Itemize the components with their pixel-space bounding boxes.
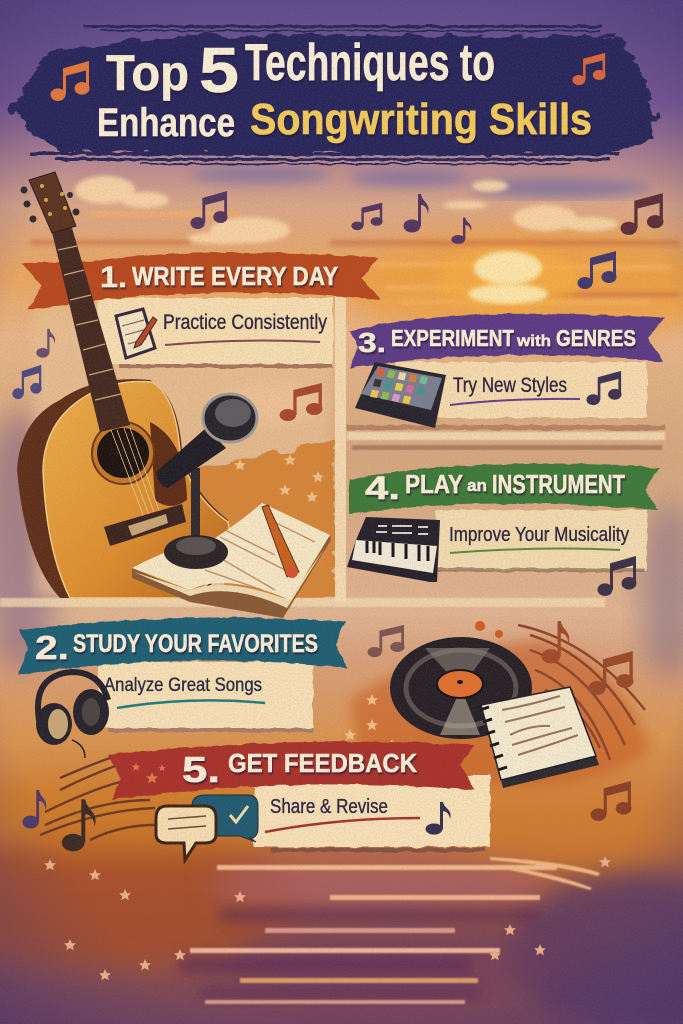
subheading: Practice Consistently — [163, 311, 327, 334]
panel 2: study your favorites — [18, 618, 348, 758]
heading — [365, 469, 625, 506]
staves and notes at upper right of record — [367, 621, 645, 760]
sound hole — [92, 422, 154, 484]
text box — [98, 662, 313, 732]
clouds and sky streaks — [30, 168, 680, 304]
neck — [52, 228, 130, 432]
icon: open book — [132, 503, 331, 618]
title text: Songwriting Skills — [250, 95, 592, 144]
icon: pencil — [262, 505, 299, 578]
heading: GET FEEDBACK — [228, 748, 417, 778]
squiggle — [265, 818, 420, 832]
title text: Top — [106, 45, 189, 101]
heading — [182, 748, 417, 790]
panel 3: experiment with genres — [347, 314, 665, 430]
heading: PLAY — [405, 469, 463, 499]
panel dividers — [0, 296, 665, 607]
decoration: orange star patch behind record — [344, 640, 650, 786]
title text — [97, 34, 592, 145]
panel 1: write every day — [22, 252, 380, 368]
subheading: Analyze Great Songs — [104, 675, 262, 696]
heading — [35, 629, 318, 666]
icon: spiral notebook — [480, 687, 599, 788]
icon: title music notes — [50, 53, 606, 101]
heading: 5. — [182, 749, 220, 790]
headstock — [29, 172, 76, 233]
heading: STUDY YOUR FAVORITES — [73, 630, 318, 658]
heading: an — [467, 476, 487, 495]
squiggle — [450, 549, 620, 553]
heading: INSTRUMENT — [492, 469, 625, 499]
panel 4: play an instrument — [347, 463, 660, 596]
icon: chat bubbles — [156, 795, 258, 860]
ribbon — [349, 463, 660, 514]
squiggle — [117, 700, 265, 708]
squiggle — [165, 341, 320, 345]
subheading: Try New Styles — [453, 374, 567, 397]
heading: 3. — [358, 327, 386, 358]
stars on ribbon — [132, 763, 166, 783]
note — [598, 556, 636, 596]
text box — [254, 775, 490, 852]
note — [586, 371, 622, 405]
heading: GENRES — [556, 325, 636, 351]
text box — [347, 362, 665, 430]
subheading: Improve Your Musicality — [449, 524, 629, 546]
ribbon — [22, 252, 380, 310]
title text: Techniques to — [245, 34, 495, 92]
panel 5: get feedback — [108, 742, 490, 860]
bottom paint streaks — [44, 856, 611, 1004]
title brush banner — [10, 25, 660, 165]
panel: left parchment with guitar — [35, 305, 335, 598]
note — [426, 802, 451, 835]
ribbon — [350, 314, 665, 368]
squiggle — [450, 399, 580, 405]
heading: EXPERIMENT — [391, 325, 514, 351]
heading: with — [516, 333, 551, 350]
subheading: Share & Revise — [270, 796, 388, 818]
sun — [438, 248, 578, 312]
icon: notepad and pencil — [116, 309, 157, 358]
left staves and notes — [22, 758, 631, 851]
ribbon — [18, 618, 348, 675]
icon: headphones — [36, 672, 109, 758]
icon: vinyl record — [390, 637, 532, 739]
icon: MIDI keyboard — [347, 517, 440, 582]
body — [17, 379, 230, 598]
text box — [98, 298, 333, 368]
stand — [191, 468, 200, 548]
heading: WRITE EVERY DAY — [132, 261, 338, 291]
text box — [430, 510, 647, 572]
head — [203, 394, 257, 442]
bridge — [104, 504, 186, 546]
handle — [156, 428, 226, 488]
title text: Enhance — [97, 101, 235, 145]
icon: drum pad machine — [355, 362, 446, 428]
heading: 1. — [100, 261, 127, 294]
sky music notes — [12, 191, 663, 399]
heading — [358, 325, 636, 358]
icon: acoustic guitar — [17, 172, 230, 598]
icon: microphone — [156, 394, 257, 569]
heading: 4. — [365, 470, 400, 506]
title text: 5 — [199, 34, 239, 106]
note: red brown — [280, 383, 322, 421]
strings — [111, 428, 162, 525]
heading: 2. — [35, 629, 69, 666]
ribbon — [108, 742, 475, 800]
